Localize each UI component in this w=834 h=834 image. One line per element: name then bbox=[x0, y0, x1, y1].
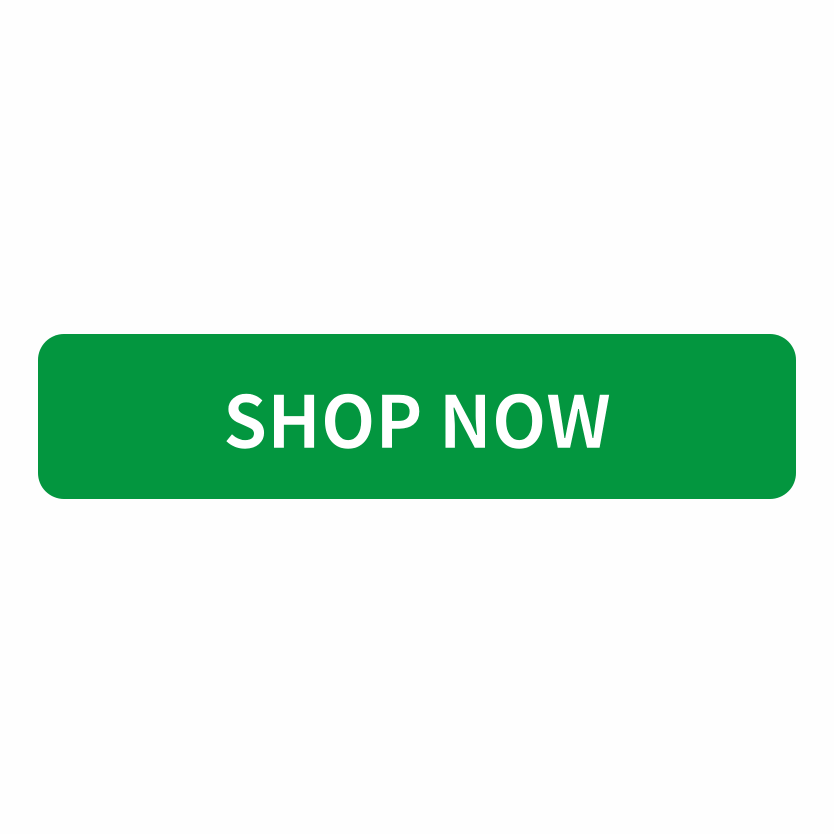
button label: SHOP NOW bbox=[223, 364, 611, 469]
button: shop now bbox=[38, 334, 796, 499]
